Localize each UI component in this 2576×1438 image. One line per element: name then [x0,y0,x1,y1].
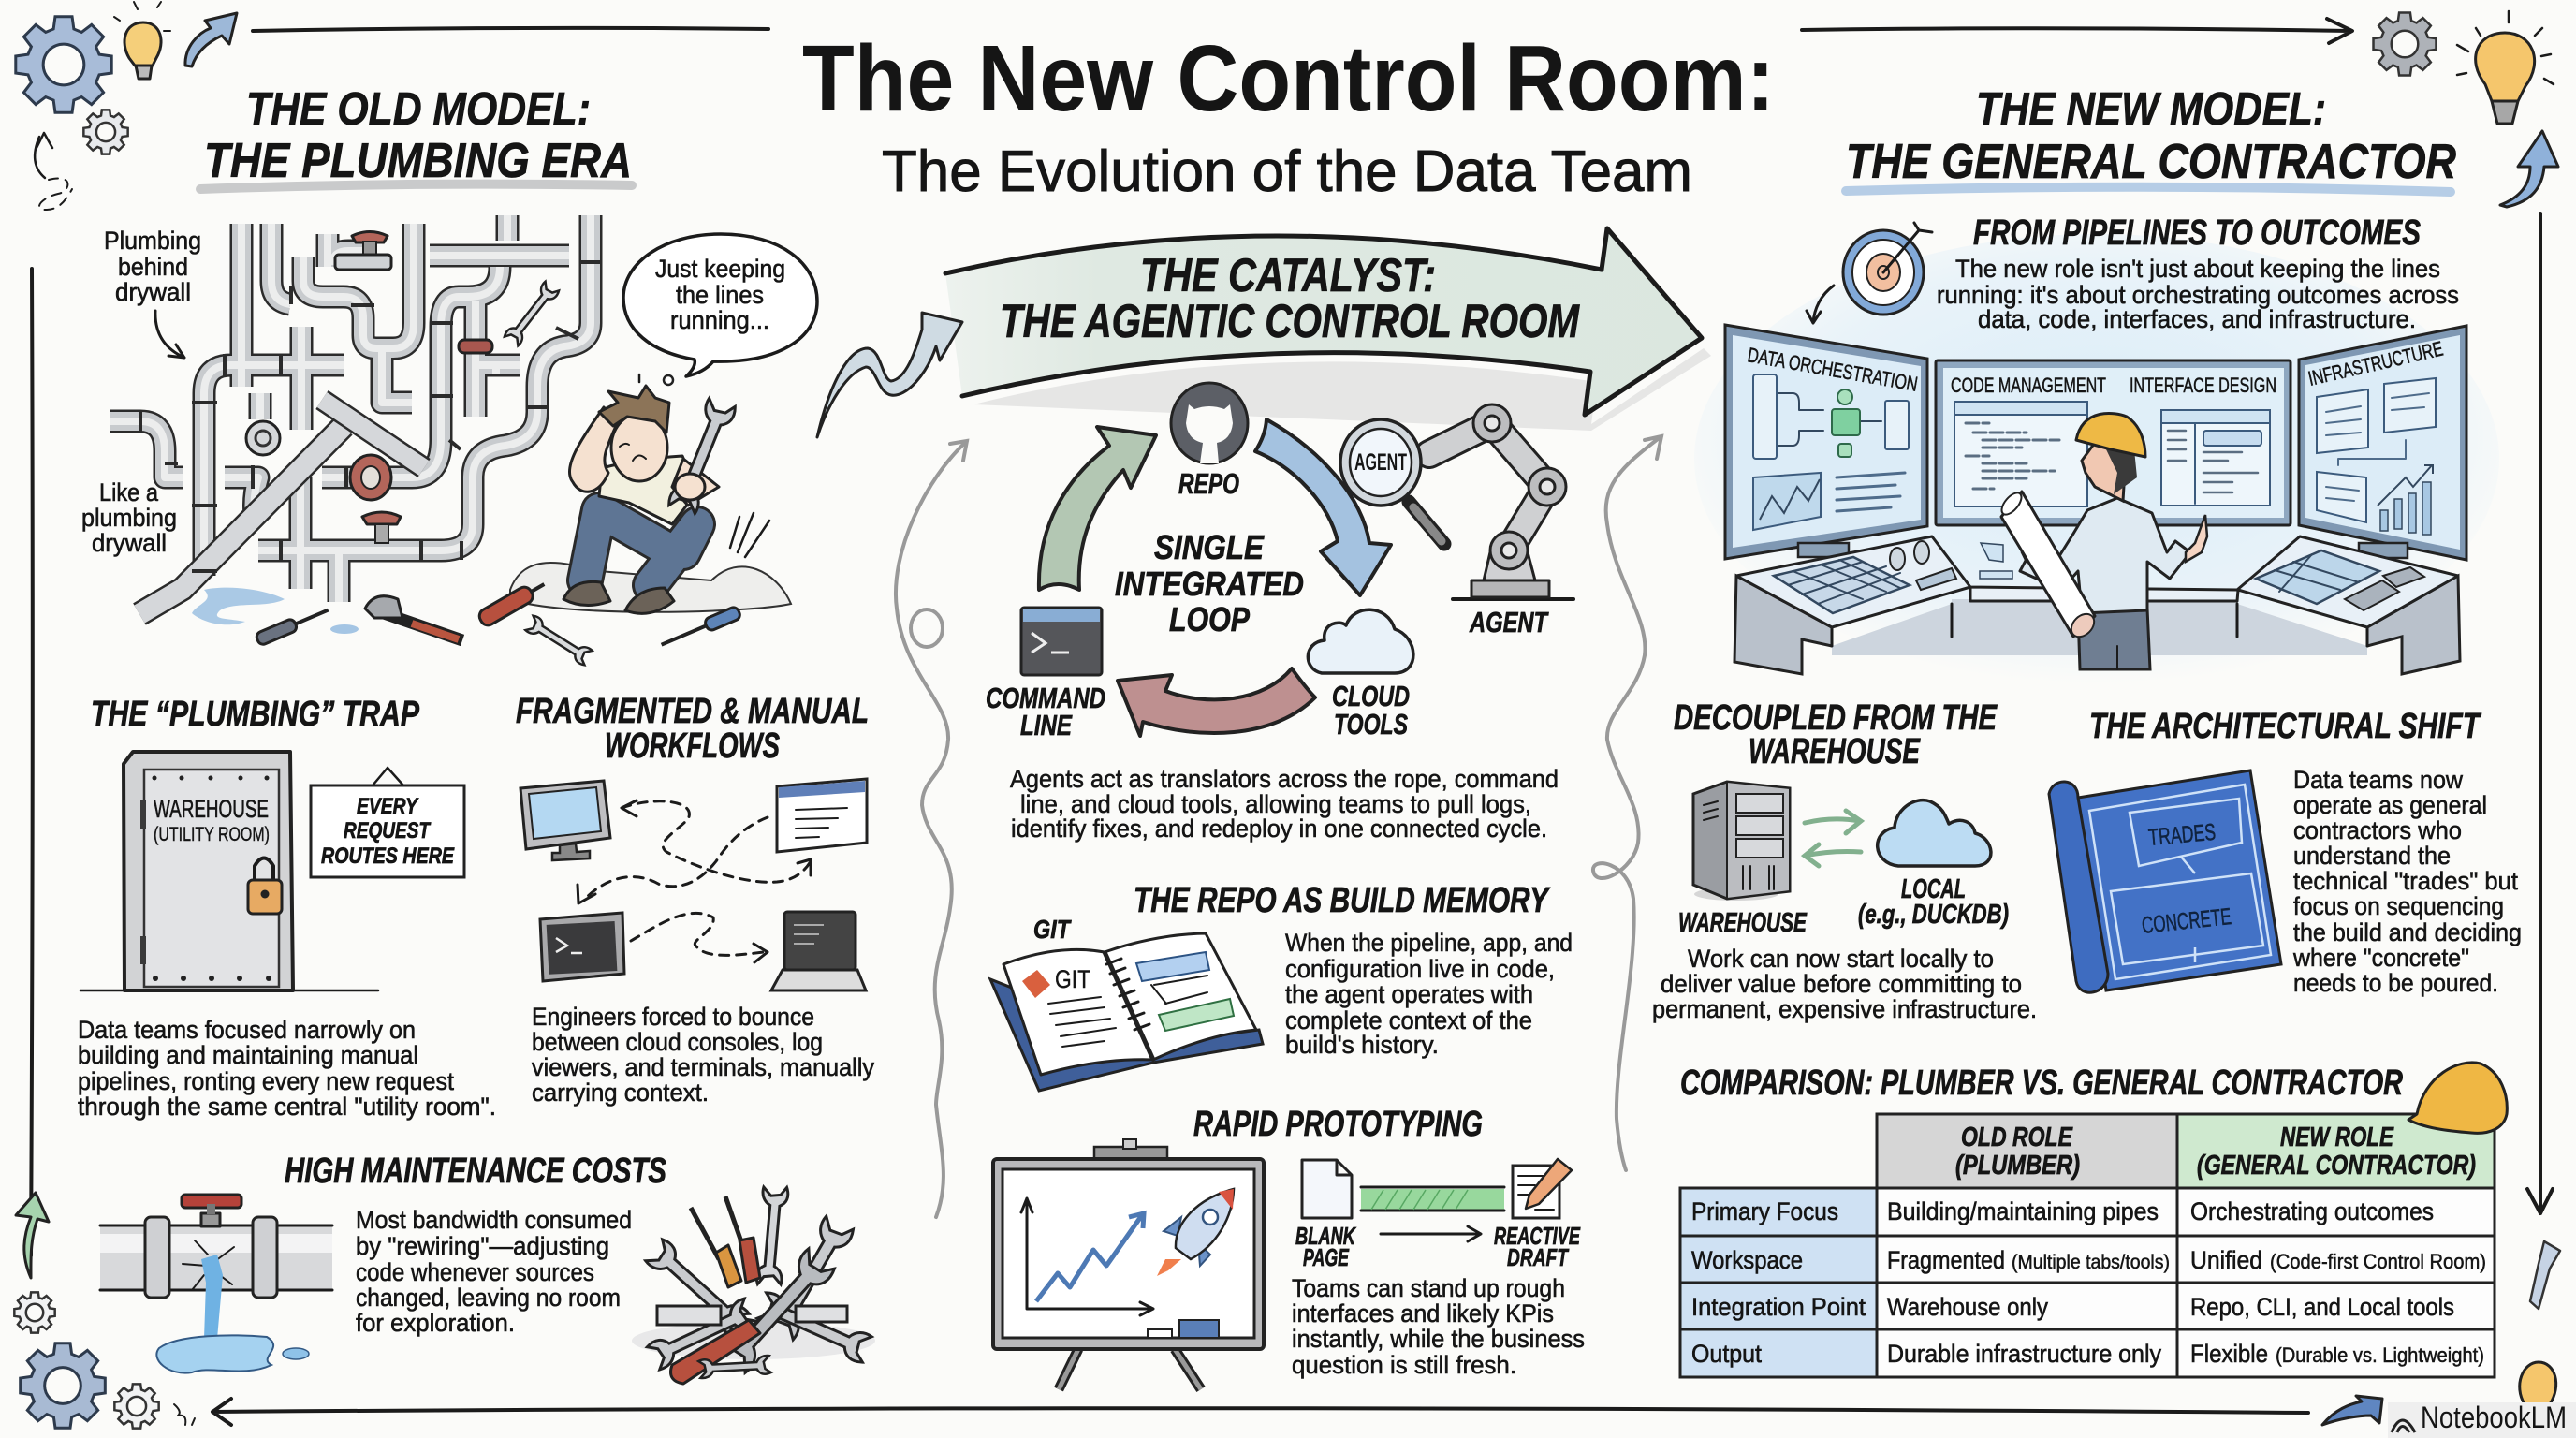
corner icons: bottom left [14,1193,195,1429]
icon: laptop [771,912,866,990]
sign: every request routes here: REQUEST [344,818,432,844]
label: REPO [1178,467,1239,500]
row: workspace: Workspace [1691,1246,1803,1274]
illustration: locked warehouse door: WAREHOUSE [154,795,269,823]
body text [532,1003,874,1107]
row: workspace: Unified [2190,1246,2262,1274]
speech bubble: running... [670,306,769,334]
table header: new role: (GENERAL CONTRACTOR) [2197,1151,2476,1181]
progress bar [1361,1187,1504,1211]
heading: HIGH MAINTENANCE COSTS [285,1152,666,1191]
row: output: Flexible [2190,1340,2268,1368]
body text: contractors who [2293,816,2462,844]
panel: plumbing trap [78,695,496,1121]
row: integration point [1691,1293,2454,1321]
heading: the new model: THE GENERAL CONTRACTOR [1846,135,2456,189]
label: COMMAND [986,682,1105,714]
sign: every request routes here: ROUTES HERE [321,844,455,869]
squiggle [174,1404,195,1425]
banner: the catalyst: THE CATALYST: [1140,249,1436,301]
panel: old model [81,84,817,667]
body text: focus on sequencing [2293,892,2504,920]
heading: WORKFLOWS [605,726,780,766]
body text: needs to be poured. [2293,969,2498,997]
monitor: data orchestration [1725,325,1927,559]
row: primary focus [1691,1197,2434,1225]
table header: new role [2197,1123,2476,1181]
row: integration point: Repo, CLI, and Local tools [2190,1293,2454,1321]
table header: new role: NEW ROLE [2280,1123,2394,1152]
body text: Toams can stand up rough [1292,1274,1565,1302]
icon: github repo [1171,383,1248,463]
icon: small gear [14,1292,55,1333]
body text: understand the [2293,842,2451,870]
dashed arrows [585,801,811,955]
speech bubble [623,234,817,385]
icon: pen tool [2530,1241,2560,1309]
icon: terminal [540,913,624,981]
center label: INTEGRATED [1115,565,1304,603]
illustration: git notebook [990,933,1263,1091]
monitor stands [1798,543,2408,558]
icon: cloud [1308,609,1413,673]
illustration: leaking pipe [100,1195,332,1373]
body text: When the pipeline, app, and [1285,929,1573,957]
body text [1292,1274,1585,1379]
row: primary focus: Building/maintaining pipes [1887,1197,2159,1225]
body text: operate as general [2293,791,2487,819]
label: like a plumbing drywall [81,478,177,557]
wavy loop [911,609,943,647]
panel: rapid prototyping [993,1105,1585,1389]
icon: light bulb [114,2,170,79]
heading: THE ARCHITECTURAL SHIFT [2089,707,2481,746]
arrowheads [578,800,811,962]
monitor: center [1936,360,2291,525]
body text: pipelines, ronting every new request [78,1067,454,1095]
body text [1937,255,2459,333]
icon: dashed curved arrow [35,133,52,178]
panel: fragmented workflows [516,692,874,1107]
illustration: git notebook: GIT [1055,965,1090,993]
arrow [1381,1226,1481,1241]
illustration: blueprint [2049,770,2281,992]
illustration: agent magnifier [1340,419,1444,544]
panel: architectural shift [2049,707,2522,997]
row: workspace: (Code-first Control Room) [2270,1250,2486,1273]
labels [1295,1222,1580,1271]
panel: new model [1694,84,2499,683]
illustration: agent robot arm [1429,404,1573,599]
label: like a plumbing drywall: drywall [92,529,167,557]
body text: Most bandwidth consumed [356,1206,632,1234]
body text: changed, leaving no room [356,1284,621,1312]
center label: LOOP [1169,600,1251,638]
table [1680,1114,2495,1377]
body text [78,1016,496,1121]
sign: every request routes here: EVERY [357,794,419,819]
icon: server [1693,782,1790,901]
heading: RAPID PROTOTYPING [1193,1105,1483,1144]
monitor: center: INTERFACE DESIGN [2130,374,2276,397]
body text: Data teams focused narrowly on [78,1016,416,1044]
label: LINE [1020,709,1073,741]
label: AGENT [1469,606,1549,638]
sign: every request routes here [311,768,464,877]
body text: where "concrete" [2292,944,2469,972]
panel: high maintenance costs [100,1152,875,1384]
icon: hard hat [2408,1063,2507,1133]
body text: technical "trades" but [2293,867,2518,895]
label: plumbing behind drywall: behind [118,253,188,281]
icon: light bulb [2457,11,2554,124]
body text: permanent, expensive infrastructure. [1652,995,2037,1023]
glow [1694,234,2499,683]
subheading: FROM PIPELINES TO OUTCOMES [1973,213,2421,253]
label: CLOUD [1332,680,1410,712]
illustration: stressed plumber [510,374,791,613]
center label: SINGLE [1154,528,1265,566]
illustration: agent magnifier: AGENT [1354,449,1407,476]
body text: code whenever sources [356,1258,594,1286]
panel: comparison table [1680,1063,2507,1377]
body text: for exploration. [356,1309,515,1337]
illustration: tangled pipes [110,215,602,634]
label: plumbing behind drywall: Plumbing [104,227,201,255]
icon: rocket [1157,1189,1234,1277]
label [1332,680,1410,741]
row: integration point: Integration Point [1691,1293,1866,1321]
panel: decoupled from the warehouse [1652,698,2037,1023]
monitor: infrastructure [2299,326,2466,560]
body text [1285,929,1573,1059]
body text: identify fixes, and redeploy in one connected cycle. [1011,814,1547,843]
icon: gear [2374,13,2436,75]
arrows [1805,811,1861,866]
speech bubble: Just keeping [655,255,785,283]
body text: between cloud consoles, log [532,1028,823,1056]
illustration: locked warehouse door [80,752,378,990]
label: TOOLS [1334,708,1408,741]
body text: viewers, and terminals, manually [532,1053,874,1081]
heading: THE “PLUMBING” TRAP [91,695,420,734]
label: plumbing behind drywall [104,227,201,358]
illustration: scattered tools [255,577,741,667]
row: workspace [1691,1246,2486,1274]
body text: running: it's about orchestrating outcomes across [1937,281,2459,309]
body text: the agent operates with [1285,980,1533,1008]
heading: the new model [1846,84,2456,192]
body text [1652,945,2037,1023]
title [802,26,1775,204]
panel: repo as build memory [990,881,1573,1091]
panel: integrated loop [986,383,1573,843]
center label [1115,528,1304,638]
body text: The new role isn't just about keeping the lines [1955,255,2440,283]
row: output [1691,1340,2484,1368]
icon: monitor [520,781,610,860]
row: workspace: Fragmented [1887,1246,2005,1274]
body text [1010,765,1559,843]
wavy divider right [1593,436,1661,1170]
row: workspace: (Multiple tabs/tools) [2012,1252,2170,1273]
monitor: center: CODE MANAGEMENT [1951,374,2106,397]
corner icons: top right [2374,11,2558,207]
dashed loop [39,179,72,210]
body text: by "rewiring"—adjusting [356,1232,609,1260]
heading [516,692,869,766]
zigzag arrow [817,313,962,437]
illustration: blueprint: TRADES [2147,819,2217,851]
label: like a plumbing drywall: Like a [99,478,159,506]
icon: target [1843,223,1932,315]
body text: Engineers forced to bounce [532,1003,814,1031]
row: primary focus: Orchestrating outcomes [2190,1197,2434,1225]
body text: the build and deciding [2293,918,2522,946]
icon: light bulb [2520,1362,2556,1404]
body text: configuration live in code, [1285,955,1555,983]
icon: reactive draft [1513,1159,1572,1218]
body text: Agents act as translators across the rope, command [1010,765,1559,793]
monitor: infrastructure: INFRASTRUCTURE [2306,336,2445,390]
heading: the old model: THE OLD MODEL: [246,84,591,135]
arrow: cloud to command line [1118,668,1315,736]
arrow: command line to repo [1039,427,1156,590]
body text [2292,766,2522,997]
illustration: pile of tools [632,1185,875,1384]
body text: building and maintaining manual [78,1041,418,1069]
row: integration point: Warehouse only [1887,1293,2048,1321]
labels: (e.g., DUCKDB) [1858,900,2009,930]
body text: interfaces and likely KPis [1292,1299,1554,1328]
heading: FRAGMENTED & MANUAL [516,692,869,731]
body text: Work can now start locally to [1688,945,1994,973]
illustration: locked warehouse door: (UTILITY ROOM) [154,824,270,845]
heading [1674,698,1998,771]
row: output: Durable infrastructure only [1887,1340,2161,1368]
speech bubble: the lines [676,281,764,309]
labels: DRAFT [1507,1243,1570,1271]
body text: build's history. [1285,1031,1439,1059]
heading: DECOUPLED FROM THE [1674,698,1998,738]
body text [356,1206,632,1337]
banner: the catalyst: THE AGENTIC CONTROL ROOM [1000,295,1580,347]
body text: question is still fresh. [1292,1351,1516,1379]
label: like a plumbing drywall: plumbing [81,504,177,532]
arrow [1807,286,1834,323]
corner icons: bottom right [2322,1241,2560,1425]
icon: cloud [1878,800,1991,866]
row: output: (Durable vs. Lightweight) [2276,1343,2484,1367]
banner: the catalyst [945,228,1711,431]
body text: complete context of the [1285,1006,1532,1034]
body text: instantly, while the business [1292,1325,1585,1353]
body text: line, and cloud tools, allowing teams to pull logs, [1020,790,1531,818]
monitor: data orchestration: DATA ORCHESTRATION [1746,343,1920,396]
labels: REACTIVE [1494,1222,1580,1250]
body text: through the same central "utility room". [78,1093,496,1121]
row: output: Output [1691,1340,1762,1368]
heading: THE REPO AS BUILD MEMORY [1134,881,1551,920]
console desk [1734,536,2460,674]
labels [1678,874,2009,938]
heading: the old model: THE PLUMBING ERA [204,134,632,188]
labels: WAREHOUSE [1678,908,1808,938]
subtitle: The Evolution of the Data Team [882,139,1692,204]
illustration: control room [1725,325,2466,674]
body text: data, code, interfaces, and infrastructure. [1978,305,2416,333]
table header: old role: OLD ROLE [1961,1123,2073,1152]
icon: blank page [1302,1160,1352,1218]
body text: Data teams now [2293,766,2463,794]
arrow: repo to cloud [1255,419,1391,595]
illustration: general contractor [1998,413,2207,669]
icon: large gear [16,17,111,112]
labels: BLANK [1295,1222,1357,1250]
heading: WAREHOUSE [1749,732,1921,771]
illustration: whiteboard [993,1139,1264,1389]
heading: the new model: THE NEW MODEL: [1976,84,2326,135]
corner icons: top left [16,2,237,178]
icon: browser window [777,779,867,852]
icon: small gear [83,110,128,154]
illustration: blueprint: CONCRETE [2141,903,2232,939]
icon: blue arrow [2322,1396,2382,1425]
body text: carrying context. [532,1078,709,1107]
row: primary focus: Primary Focus [1691,1197,1838,1225]
title: The New Control Room: [802,26,1775,131]
icon: large gear [21,1343,105,1428]
icon: blue arrow [185,13,237,66]
label: plumbing behind drywall: drywall [115,278,191,306]
labels: PAGE [1303,1243,1349,1271]
table header: old role: (PLUMBER) [1955,1151,2080,1181]
wavy divider left [896,441,967,1217]
icon: green arrow [16,1193,49,1278]
labels: LOCAL [1901,874,1966,904]
label [986,682,1105,741]
table header: old role [1955,1123,2080,1181]
icon: small gear [114,1384,159,1429]
icon: blue arrow [2500,131,2558,207]
icon: terminal [1021,608,1102,675]
heading: the old model [200,84,632,189]
body text: deliver value before committing to [1661,970,2022,998]
label: GIT [1033,915,1072,944]
